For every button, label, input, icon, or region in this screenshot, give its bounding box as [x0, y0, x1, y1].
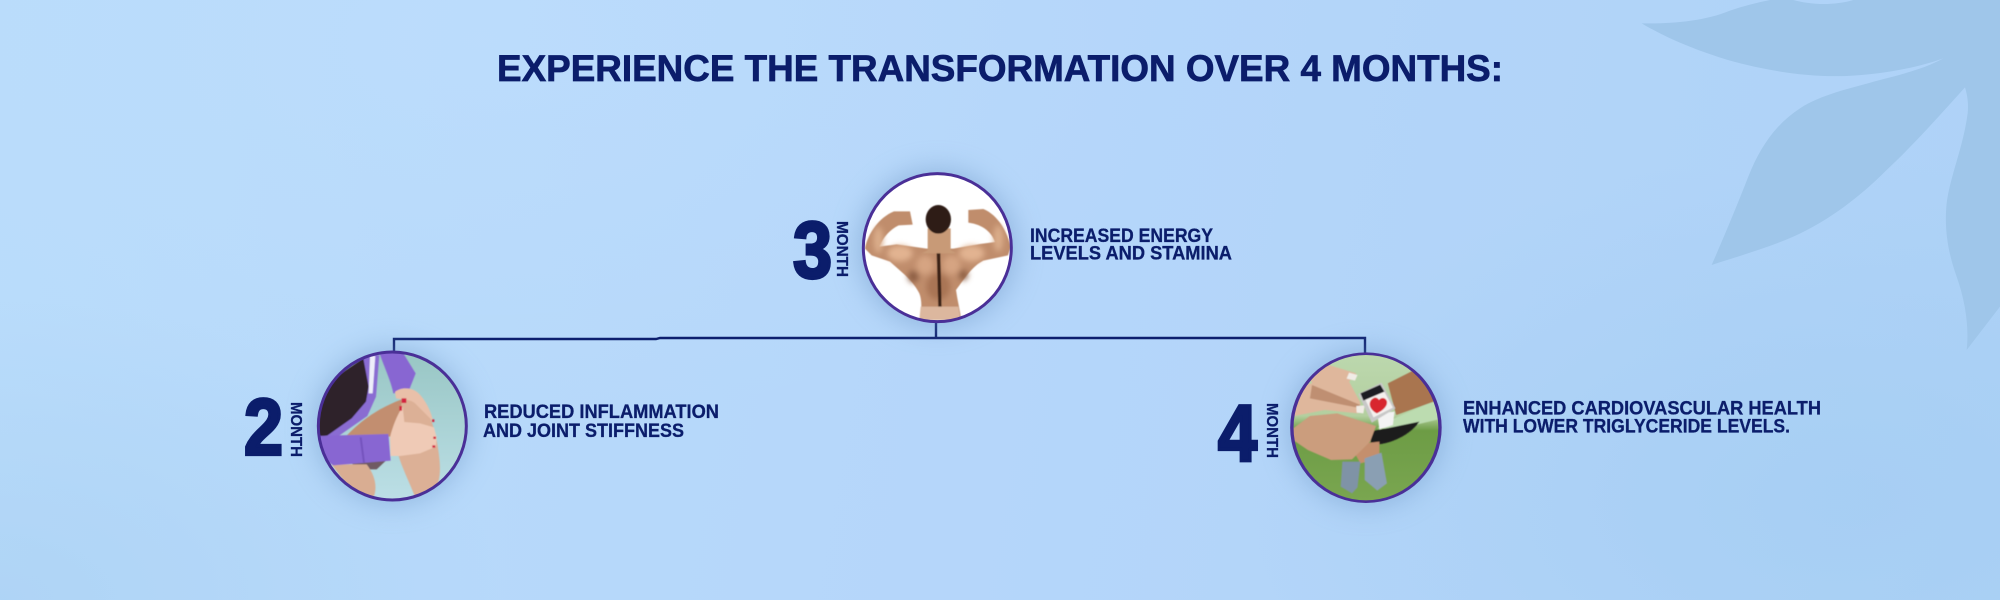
- number 2: 2: [244, 382, 283, 472]
- month label: MONTH: [833, 221, 850, 277]
- description: [1463, 398, 1821, 438]
- title: EXPERIENCE THE TRANSFORMATION OVER 4 MONTHS:: [497, 48, 1503, 89]
- photo: smartwatch heart rate: [1291, 354, 1440, 502]
- photo: flexing back: [863, 174, 1011, 322]
- number 4: 4: [1218, 388, 1257, 478]
- circle shadow: [1288, 350, 1444, 506]
- milestone: month 2: [244, 348, 719, 504]
- description: [1030, 226, 1232, 264]
- description: [483, 402, 719, 442]
- milestone: month 4: [1218, 350, 1821, 506]
- decorative leaf watermark: [1642, 0, 2000, 350]
- photo: knee pain: [317, 350, 466, 501]
- number 3: 3: [793, 206, 832, 294]
- milestone: month 3: [793, 170, 1232, 326]
- description: AND JOINT STIFFNESS: [483, 421, 684, 442]
- circle shadow: [859, 170, 1015, 326]
- description: WITH LOWER TRIGLYCERIDE LEVELS.: [1463, 416, 1790, 438]
- circle shadow: [314, 348, 470, 504]
- description: LEVELS AND STAMINA: [1030, 244, 1232, 264]
- description: REDUCED INFLAMMATION: [484, 402, 719, 423]
- description: INCREASED ENERGY: [1030, 226, 1213, 247]
- description: ENHANCED CARDIOVASCULAR HEALTH: [1463, 398, 1821, 420]
- connector lines: [394, 322, 1365, 353]
- month label: MONTH: [1263, 403, 1280, 458]
- month label: MONTH: [287, 402, 304, 457]
